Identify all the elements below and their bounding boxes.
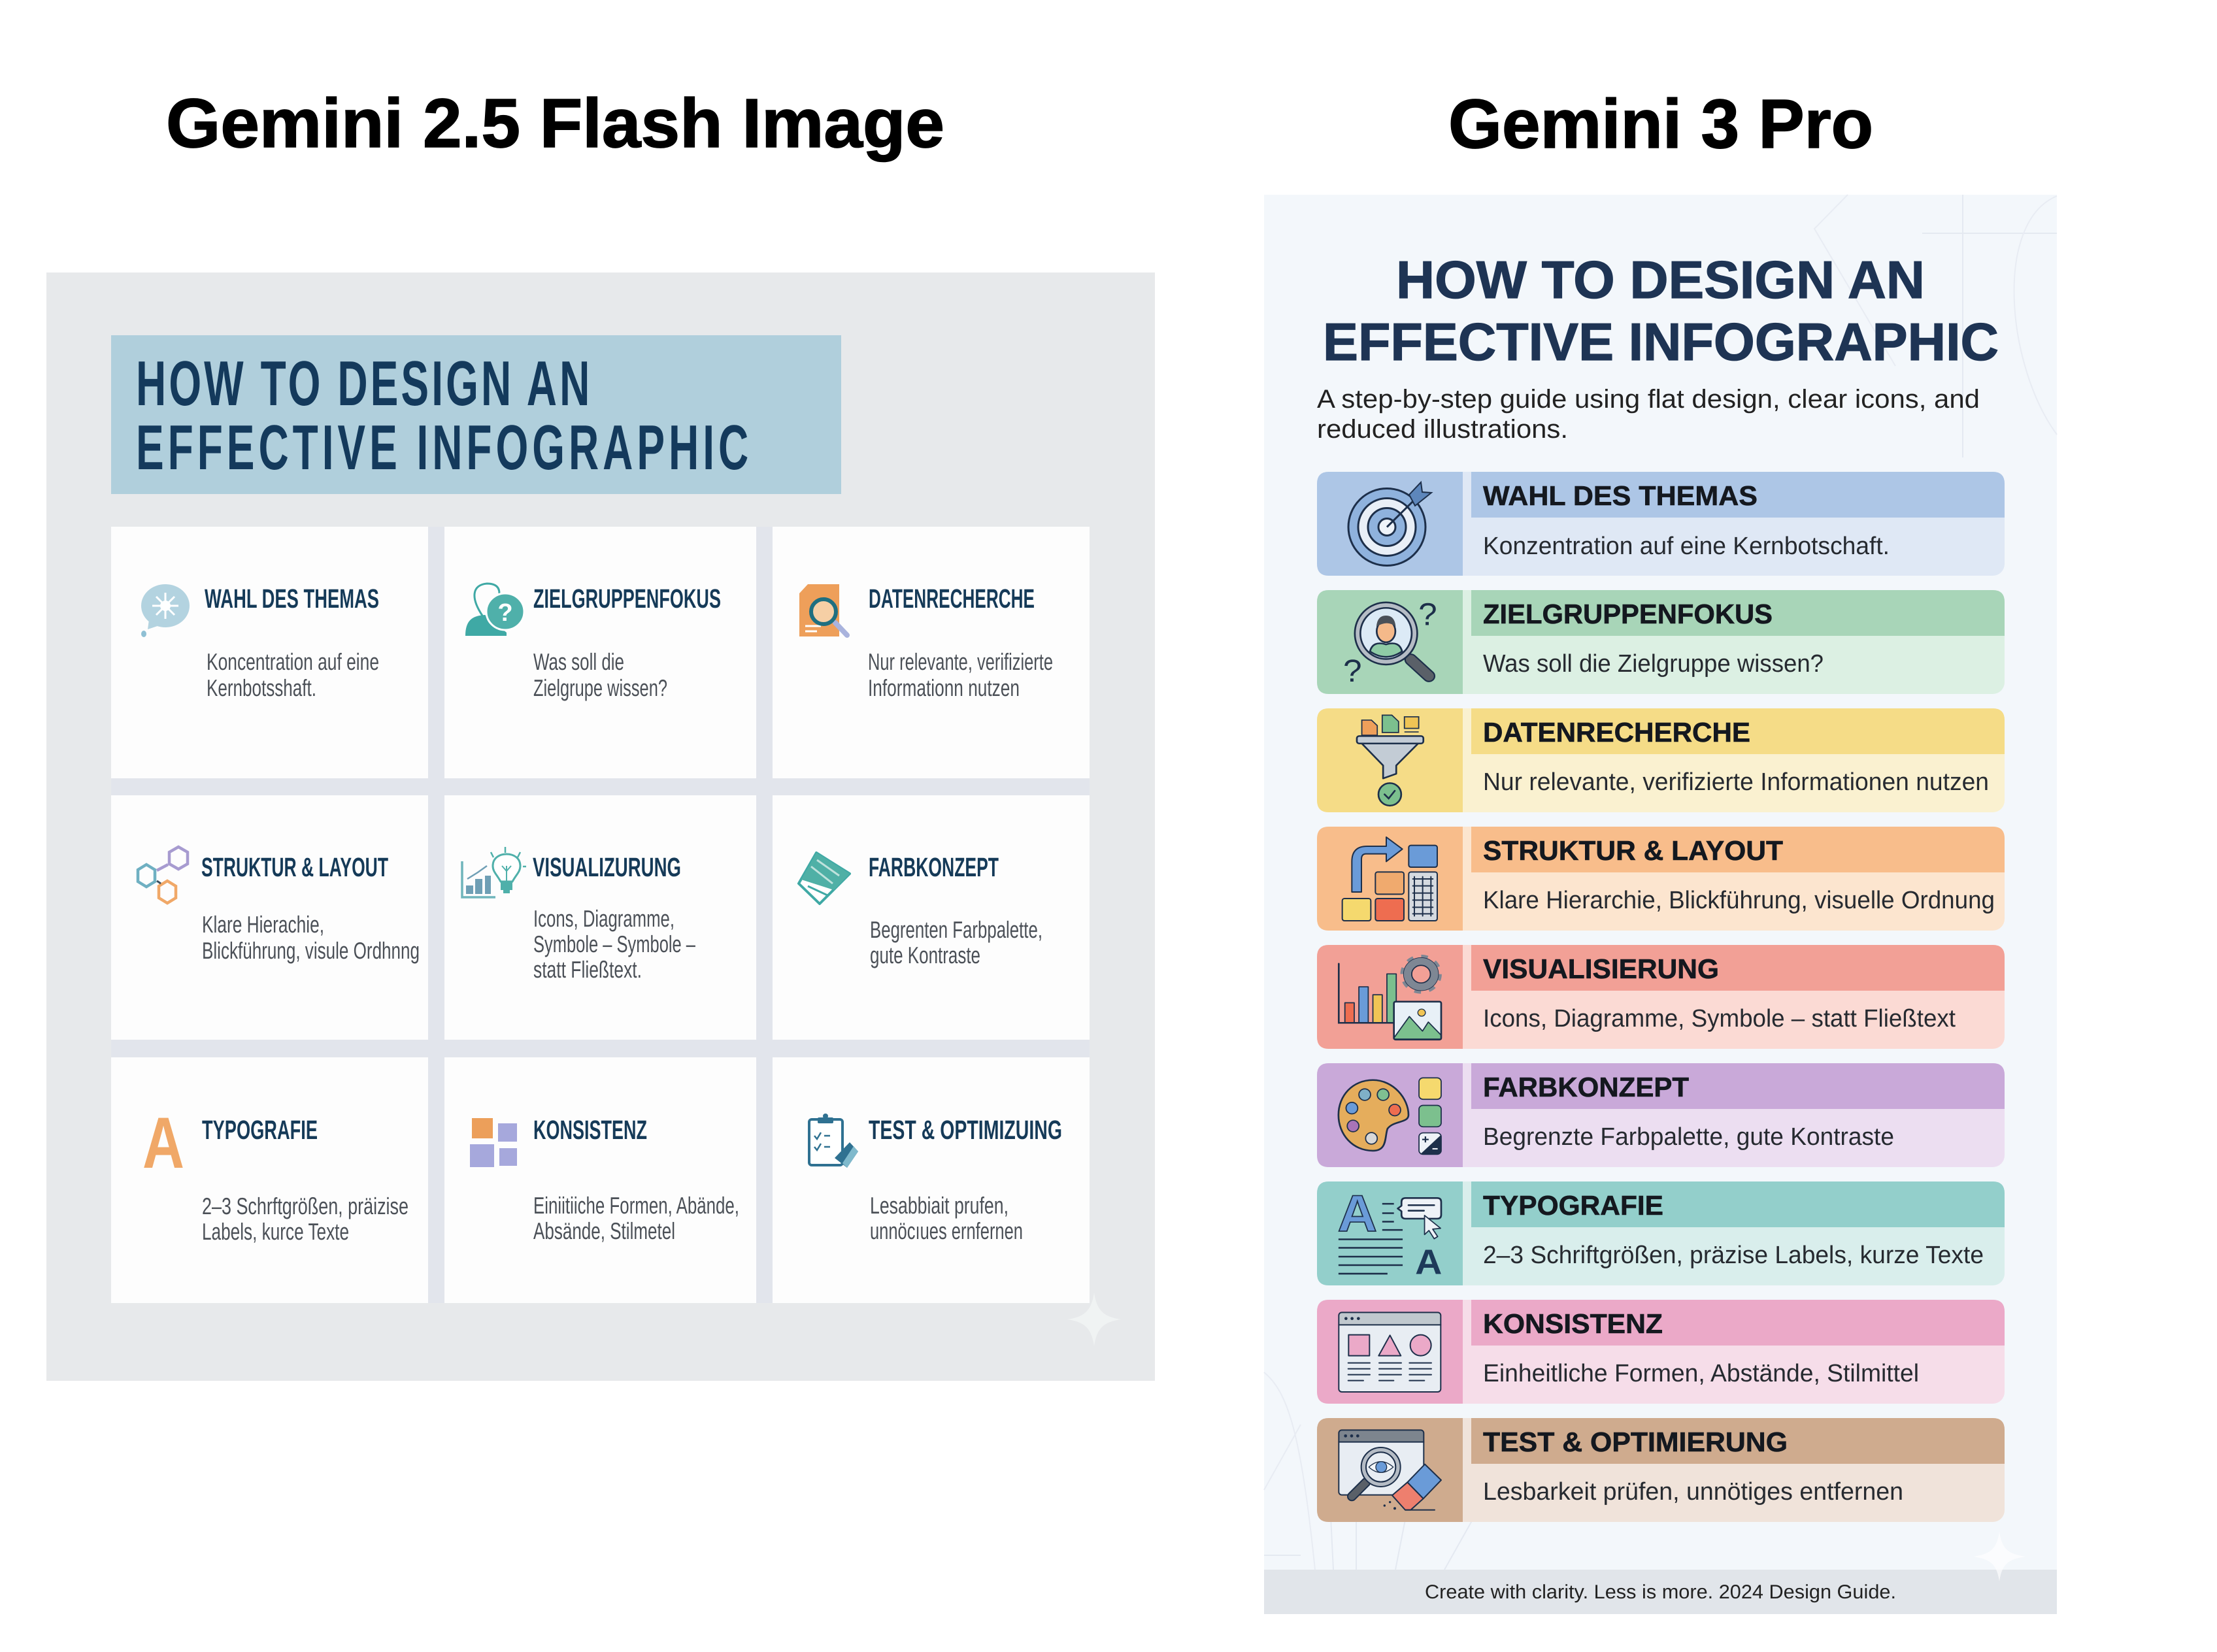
body text: Absände, Stilmetel (533, 1217, 675, 1244)
icon: chart and light bulb (462, 847, 526, 897)
body text: 2–3 Schrftgrößen, präizise (202, 1193, 408, 1219)
icon: sparkle watermark (1067, 1293, 1121, 1346)
icon: window with magnifier and eraser (1339, 1430, 1441, 1510)
body text: statt Fließtext. (533, 956, 642, 983)
heading: DATENRECHERCHE (869, 584, 1035, 614)
icon: letter A: A (142, 1102, 184, 1183)
body text: Kernbotsshaft. (207, 674, 316, 701)
icon: palette and swatches (1339, 1078, 1441, 1154)
heading: VISUALIZURUNG (533, 852, 681, 882)
panel: Gemini 3 Pro infographic (1264, 195, 2057, 1614)
icon: document with magnifier (799, 584, 847, 636)
row: Visualisierung (1317, 945, 2005, 1049)
heading: Gemini 2.5 Flash Image: Gemini 2.5 Flash Image (166, 85, 944, 162)
title banner: HOW TO DESIGN AN (136, 348, 590, 419)
card: Datenrecherche (773, 527, 1090, 778)
row: Konsistenz (1317, 1300, 2005, 1404)
icon: speech bubble with sun (141, 584, 190, 637)
icon: person with question mark (465, 584, 524, 636)
heading: WAHL DES THEMAS (1483, 480, 1758, 511)
heading: WAHL DES THEMAS (205, 584, 379, 614)
footer bar (1264, 1570, 2057, 1614)
title: HOW TO DESIGN AN (1396, 251, 1925, 310)
body text: Was soll die (533, 648, 624, 675)
description: Lesbarkeit prüfen, unnötiges entfernen (1483, 1478, 1903, 1506)
heading: TEST & OPTIMIZUING (869, 1115, 1062, 1145)
body text: Koncentration auf eine (207, 648, 379, 675)
description: Klare Hierarchie, Blickführung, visuelle Ordnung (1483, 887, 1995, 914)
description: Nur relevante, verifizierte Informationen nutzen (1483, 768, 1989, 796)
body text (870, 1192, 1023, 1244)
description: Begrenzte Farbpalette, gute Kontraste (1483, 1123, 1894, 1151)
subtitle: reduced illustrations. (1317, 415, 1568, 444)
card: Struktur & Layout (111, 795, 428, 1040)
body text: Icons, Diagramme, (533, 905, 675, 932)
heading: STRUKTUR & LAYOUT (1483, 835, 1783, 866)
icon: browser window with shapes (1339, 1312, 1441, 1392)
heading: STRUKTUR & LAYOUT (201, 852, 388, 882)
title banner: EFFECTIVE INFOGRAPHIC (136, 412, 748, 483)
row: Test & Optimierung (1317, 1418, 2005, 1522)
card: Wahl des Themas (111, 527, 428, 778)
heading: TYPOGRAFIE (202, 1115, 318, 1145)
title: EFFECTIVE INFOGRAPHIC (1323, 313, 1999, 372)
body text: Nur relevante, verifizierte (868, 648, 1053, 675)
heading: FARBKONZEPT (1483, 1072, 1689, 1102)
body text: Klare Hierachie, (202, 911, 324, 938)
icon: colour swatch (799, 853, 850, 904)
card: Typografie (111, 1057, 428, 1303)
body text (207, 648, 379, 701)
body text (533, 648, 667, 701)
body text (533, 1192, 739, 1244)
body text: Einiitiiche Formen, Abände, (533, 1192, 739, 1219)
icon: sparkle watermark (1973, 1532, 2025, 1581)
heading: VISUALISIERUNG (1483, 953, 1719, 984)
icon: magnifier with person (1343, 597, 1437, 689)
body text: Informationn nutzen (868, 674, 1020, 701)
footer bar: Create with clarity. Less is more. 2024 Design Guide. (1425, 1581, 1896, 1603)
icon: letters, text lines and cursor: A (1338, 1184, 1377, 1242)
card: Farbkonzept (773, 795, 1090, 1040)
row: Struktur & Layout (1317, 827, 2005, 931)
icon: layout blocks with arrow (1342, 837, 1437, 921)
subtitle: A step-by-step guide using flat design, clear icons, and (1317, 385, 1980, 414)
heading: Gemini 3 Pro: Gemini 3 Pro (1448, 86, 1873, 163)
icon: letters, text lines and cursor (1338, 1184, 1442, 1281)
body text (533, 905, 695, 983)
icon: target with arrow (1348, 482, 1431, 566)
icon: magnifier with person: ? (1343, 653, 1362, 689)
card: Konsistenz (444, 1057, 756, 1303)
body text (202, 911, 420, 964)
icon: magnifier with person: ? (1418, 597, 1437, 632)
heading: TEST & OPTIMIERUNG (1483, 1427, 1788, 1457)
body text (202, 1193, 408, 1245)
row: Wahl des Themas (1317, 472, 2005, 576)
icon: letters, text lines and cursor: A (1415, 1242, 1442, 1281)
heading: FARBKONZEPT (869, 852, 999, 882)
icon: chart, gear and picture (1339, 957, 1441, 1040)
row: Datenrecherche (1317, 708, 2005, 812)
subtitle (1317, 385, 1980, 444)
title (1323, 251, 1999, 372)
body text: Begrenten Farbpalette, (870, 916, 1042, 943)
description: 2–3 Schriftgrößen, präzise Labels, kurze Texte (1483, 1242, 1984, 1269)
body text: Lesabbiait prufen, (870, 1192, 1008, 1219)
body text: unnöcıues ernfernen (870, 1217, 1023, 1244)
body text (870, 916, 1042, 968)
body text: Symbole – Symbole – (533, 931, 695, 957)
icon: clipboard with eraser (809, 1114, 858, 1168)
heading: ZIELGRUPPENFOKUS (533, 584, 721, 614)
body text: gute Kontraste (870, 942, 980, 968)
card: Zielgruppenfokus (444, 527, 756, 778)
icon: squares (470, 1118, 517, 1167)
heading: KONSISTENZ (533, 1115, 647, 1145)
heading: TYPOGRAFIE (1483, 1190, 1663, 1221)
icon: connected hexagons (138, 847, 188, 903)
icon: person with question mark: ? (497, 599, 513, 627)
body text: Blickführung, visule Ordhnng (202, 937, 420, 964)
body text (868, 648, 1053, 701)
panel: Gemini 2.5 Flash infographic (46, 273, 1155, 1381)
description: Was soll die Zielgruppe wissen? (1483, 650, 1824, 678)
row: Typografie (1317, 1181, 2005, 1285)
row: Zielgruppenfokus (1317, 590, 2005, 694)
description: Icons, Diagramme, Symbole – statt Fließtext (1483, 1005, 1956, 1032)
heading: DATENRECHERCHE (1483, 717, 1750, 748)
body text: Zielgrupe wissen? (533, 674, 667, 701)
description: Konzentration auf eine Kernbotschaft. (1483, 533, 1890, 560)
icon: funnel with documents and check (1357, 715, 1424, 806)
title banner (111, 335, 841, 494)
card: Visualizurung (444, 795, 756, 1040)
card: Test & Optimizuing (773, 1057, 1090, 1303)
body text: Labels, kurce Texte (202, 1218, 349, 1245)
description: Einheitliche Formen, Abstände, Stilmittel (1483, 1360, 1919, 1387)
heading: KONSISTENZ (1483, 1308, 1663, 1339)
heading: ZIELGRUPPENFOKUS (1483, 599, 1773, 629)
row: Farbkonzept (1317, 1063, 2005, 1167)
